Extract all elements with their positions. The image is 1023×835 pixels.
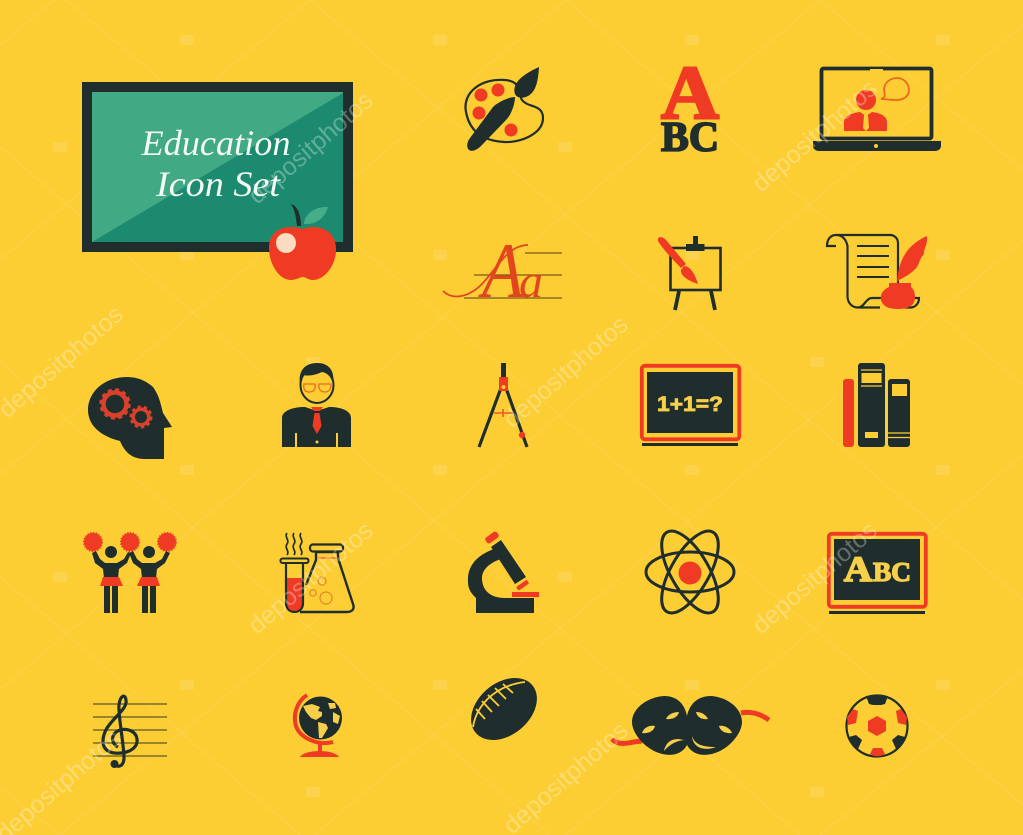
icon: calligraphy Aa — [443, 227, 562, 314]
icon: drawing compass — [479, 363, 527, 447]
icon: scroll with quill and ink — [827, 235, 927, 309]
icon: microscope — [468, 531, 539, 613]
icon: chalkboard ABC: BC — [873, 557, 911, 587]
icon: test tube and flask — [280, 533, 354, 612]
icon: globe — [295, 695, 342, 757]
icon: american football — [459, 665, 549, 753]
title — [140, 123, 290, 204]
icon: calligraphy Aa: A — [478, 227, 524, 314]
icon: continents — [303, 703, 340, 738]
icon: atom — [646, 523, 734, 621]
icon: teacher with glasses — [282, 363, 351, 447]
icon: ABC letters: BC — [661, 115, 719, 161]
icon: soccer ball — [846, 696, 908, 756]
icon: books — [843, 363, 910, 447]
icon: easel and brush — [658, 236, 720, 310]
watermarks: depositphotos — [747, 74, 883, 198]
icon: chalkboard ABC: A — [844, 549, 872, 589]
icon: chalkboard 1+1=? — [642, 366, 739, 446]
icon: chalkboard ABC — [829, 534, 926, 614]
icon: apple — [269, 204, 336, 280]
watermarks: depositphotos — [498, 310, 634, 434]
icon: large gear — [101, 390, 129, 418]
icon: small gear — [131, 407, 151, 427]
icon: ABC letters: A — [661, 51, 719, 135]
icon: calligraphy Aa: a — [519, 255, 543, 308]
watermarks: depositphotos — [243, 86, 379, 210]
icon: cheerleaders — [84, 533, 176, 613]
icon: palette and brush — [465, 67, 543, 151]
panel: chalkboard title — [82, 82, 353, 252]
watermarks — [0, 74, 883, 835]
icon: laptop with teacher — [813, 68, 941, 151]
watermarks: depositphotos — [243, 516, 379, 640]
icon: head with gears — [88, 377, 172, 459]
watermarks: depositphotos — [747, 516, 883, 640]
title: Education — [140, 123, 290, 163]
icon: chalkboard 1+1=?: 1+1=? — [657, 393, 723, 416]
icon: treble clef on staff — [93, 696, 167, 768]
icon: theatre masks — [612, 696, 769, 755]
title: Icon Set — [155, 164, 281, 204]
